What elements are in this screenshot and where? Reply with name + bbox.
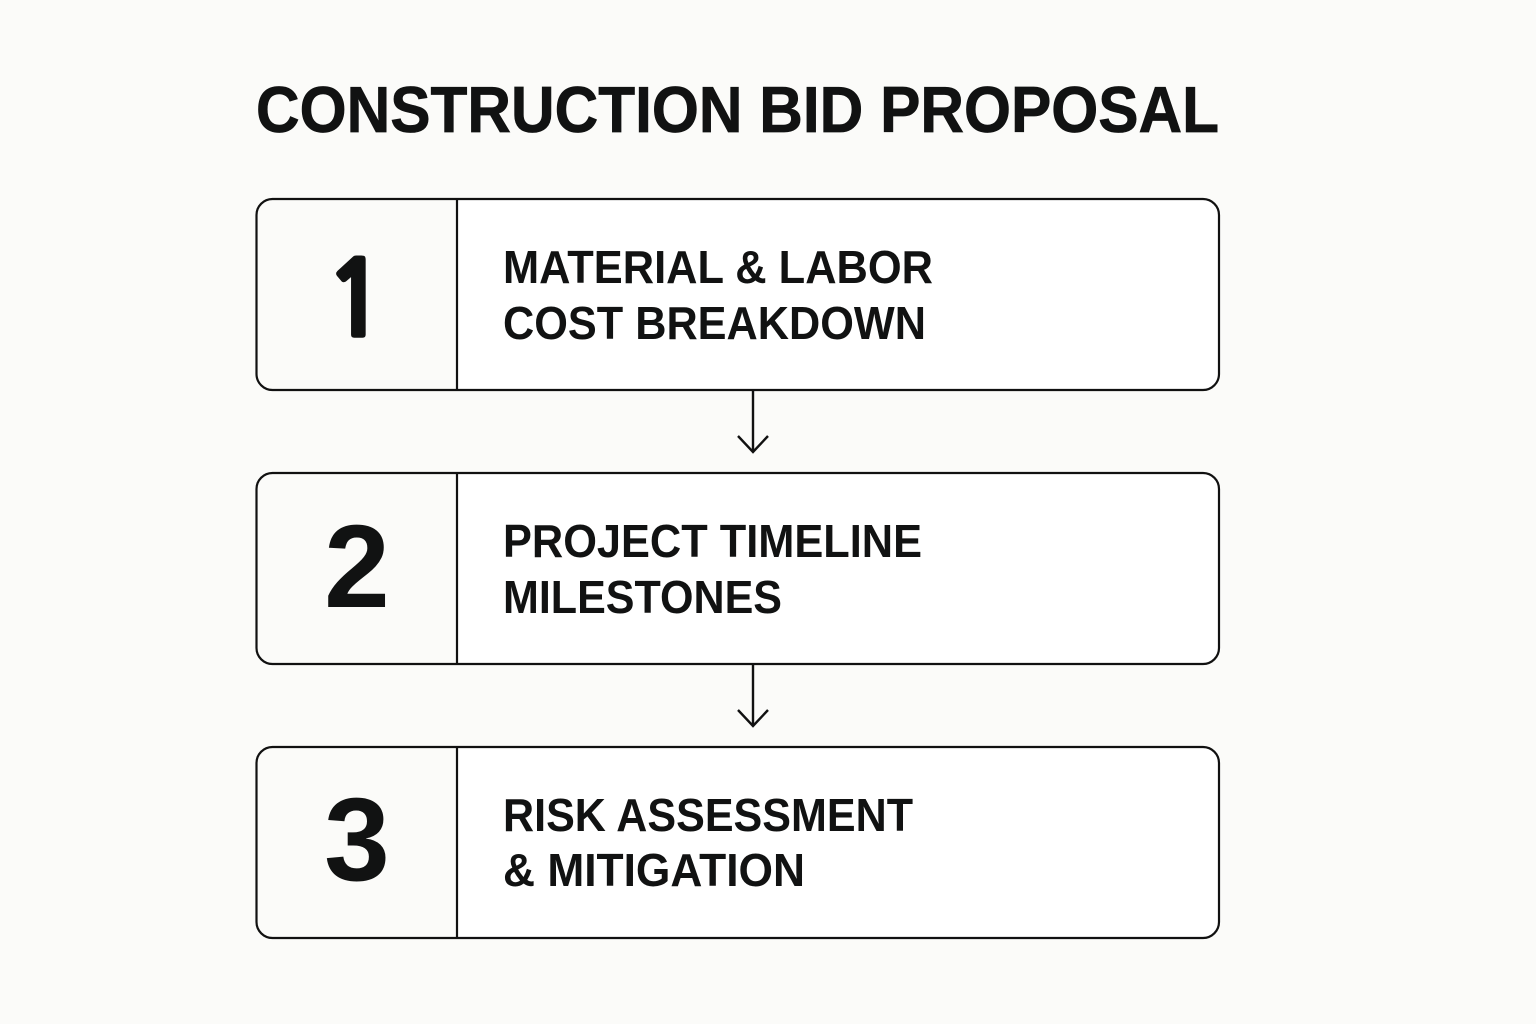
step 2 label: MILESTONES [503, 571, 782, 623]
arrow: step 1 to step 2 [738, 390, 768, 452]
panel: step 1 material and labor [256, 199, 1219, 390]
step number 2: 2 [324, 501, 390, 633]
step 3 label: RISK ASSESSMENT [503, 789, 913, 841]
panel: step 3 risk assessment [256, 747, 1219, 938]
panel: step 2 project timeline [256, 473, 1219, 664]
step number 3: 3 [324, 774, 390, 906]
step 1 label: COST BREAKDOWN [503, 297, 926, 349]
arrow: step 2 to step 3 [738, 664, 768, 726]
step 3 label: & MITIGATION [503, 844, 805, 896]
step number 1: 1 [324, 250, 388, 352]
step 1 label: MATERIAL & LABOR [503, 241, 933, 293]
title: CONSTRUCTION BID PROPOSAL [256, 73, 1219, 146]
step 2 label: PROJECT TIMELINE [503, 515, 922, 567]
